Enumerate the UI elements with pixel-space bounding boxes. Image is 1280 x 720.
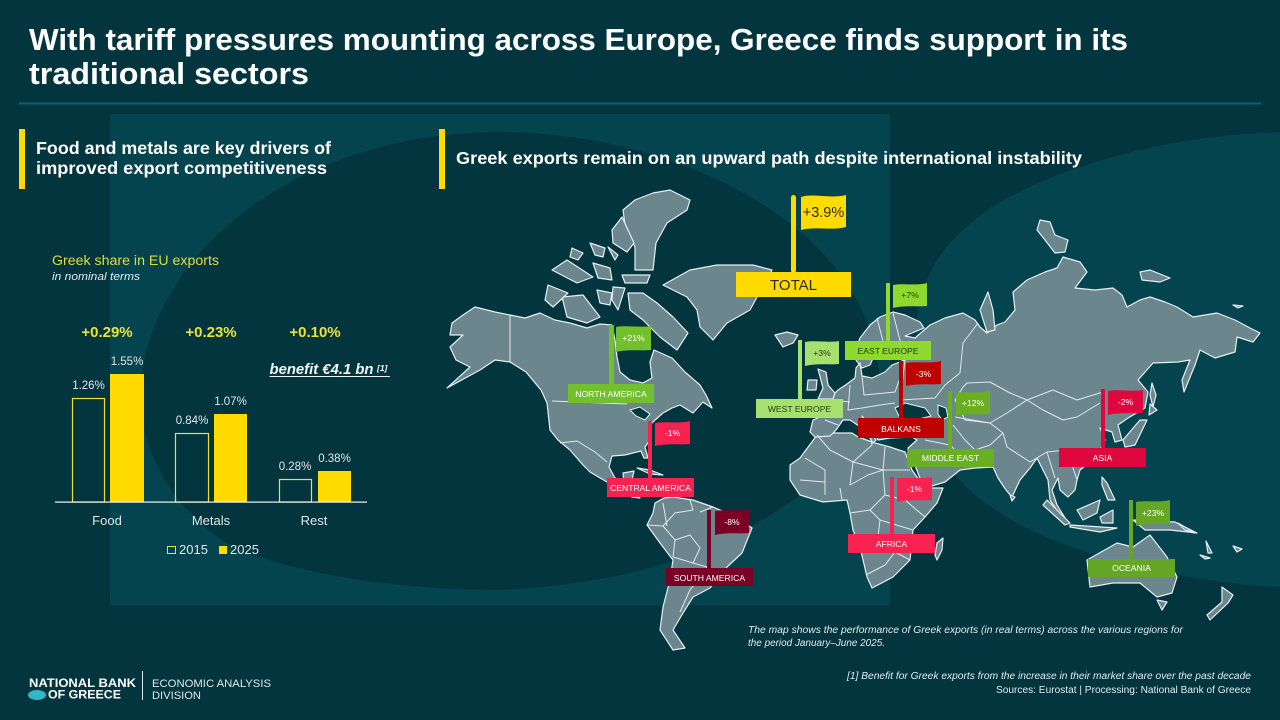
value labels: 0.84% — [176, 415, 208, 427]
flag: west europe: +3% — [813, 348, 831, 358]
benefit callout: benefit €4.1 bn — [270, 362, 374, 378]
flag: balkans: BALKANS — [881, 424, 921, 434]
panel heading: food and metals — [19, 129, 331, 189]
panel heading: greek exports: Greek exports remain on an upward path despite international instability — [456, 148, 1082, 168]
north america — [447, 307, 712, 498]
flag: south america: -8% — [724, 517, 740, 527]
flag: east europe: +7% — [901, 290, 919, 300]
flag: east europe: EAST EUROPE — [858, 346, 919, 356]
panel heading: food and metals: improved export competitiveness — [36, 158, 327, 178]
title: traditional sectors — [29, 56, 309, 91]
flag: oceania: OCEANIA — [1112, 563, 1151, 573]
change labels: +0.29% — [81, 324, 133, 341]
change labels — [81, 324, 341, 341]
logo: NATIONAL BANK — [29, 676, 136, 690]
madagascar — [935, 538, 943, 560]
change labels: +0.23% — [185, 324, 237, 341]
value labels — [72, 356, 351, 473]
flag: asia: ASIA — [1093, 453, 1113, 463]
value labels: 1.26% — [72, 380, 105, 392]
category labels: Metals — [192, 513, 231, 528]
title — [29, 22, 1128, 91]
value labels: 1.55% — [111, 356, 143, 368]
footnotes: Sources: Eurostat | Processing: National Bank of Greece — [996, 685, 1251, 696]
arctic islands — [545, 190, 690, 350]
legend — [168, 542, 259, 557]
map note — [748, 625, 1184, 649]
flag: middle east: MIDDLE EAST — [922, 453, 980, 463]
bars 2025 — [110, 374, 351, 502]
flag: west europe: WEST EUROPE — [768, 404, 831, 414]
category labels — [92, 513, 328, 528]
map note: The map shows the performance of Greek exports (in real terms) across the various regions for — [748, 625, 1184, 636]
africa — [790, 433, 943, 588]
footnotes: [1] Benefit for Greek exports from the increase in their market share over the past decade — [846, 671, 1251, 682]
greenland — [663, 265, 772, 340]
country borders — [510, 313, 1103, 612]
flag: balkans — [858, 361, 944, 438]
logo — [28, 671, 271, 702]
legend: 2025 — [230, 542, 259, 557]
flag: east europe — [845, 283, 931, 360]
eurasia — [810, 257, 1260, 518]
chart title: in nominal terms — [52, 271, 141, 283]
flag: north america: +21% — [622, 333, 645, 343]
chart title — [52, 253, 219, 283]
value labels: 1.07% — [214, 396, 247, 408]
flag: africa — [848, 477, 935, 553]
panel heading: greek exports — [439, 129, 1082, 189]
flag: central america: -1% — [665, 428, 680, 438]
flag: oceania: +23% — [1142, 508, 1164, 518]
map note: the period January–June 2025. — [748, 638, 885, 649]
flag: south america — [666, 510, 753, 586]
title: With tariff pressures mounting across Europe, Greece finds support in its — [29, 22, 1128, 57]
flag: africa: AFRICA — [876, 539, 908, 549]
flag: oceania — [1088, 500, 1175, 577]
flag: north america — [568, 325, 654, 403]
flag: central america — [607, 421, 694, 497]
flag: central america: CENTRAL AMERICA — [610, 483, 691, 493]
change labels: +0.10% — [289, 324, 341, 341]
value labels: 0.38% — [318, 453, 351, 465]
flag: total — [736, 195, 851, 297]
legend: 2015 — [179, 542, 208, 557]
iceland — [775, 332, 798, 347]
flag: africa: -1% — [907, 484, 922, 494]
flag: asia — [1059, 389, 1146, 467]
benefit callout: [1] — [376, 363, 389, 373]
flag: south america: SOUTH AMERICA — [674, 573, 745, 583]
category labels: Food — [92, 513, 122, 528]
islands — [637, 220, 1243, 620]
flag: west europe — [756, 340, 843, 418]
footnotes — [846, 671, 1251, 696]
flag: middle east: +12% — [962, 398, 984, 408]
south america — [647, 497, 752, 650]
bars 2015 — [72, 398, 312, 502]
flag: total: TOTAL — [770, 277, 817, 294]
seas — [630, 403, 948, 420]
world map — [447, 190, 1260, 650]
flag: north america: NORTH AMERICA — [575, 389, 647, 399]
bar chart: greek share in EU exports — [52, 253, 390, 557]
flag: total: +3.9% — [803, 205, 844, 221]
chart title: Greek share in EU exports — [52, 253, 219, 268]
logo: ECONOMIC ANALYSIS — [152, 678, 271, 690]
flag: asia: -2% — [1118, 397, 1133, 407]
flag: balkans: -3% — [916, 369, 931, 379]
panel heading: food and metals: Food and metals are key drivers of — [36, 138, 331, 158]
value labels: 0.28% — [279, 461, 311, 473]
logo: OF GREECE — [48, 688, 121, 702]
flag: middle east — [907, 391, 994, 467]
logo: DIVISION — [152, 690, 201, 702]
category labels: Rest — [301, 513, 328, 528]
